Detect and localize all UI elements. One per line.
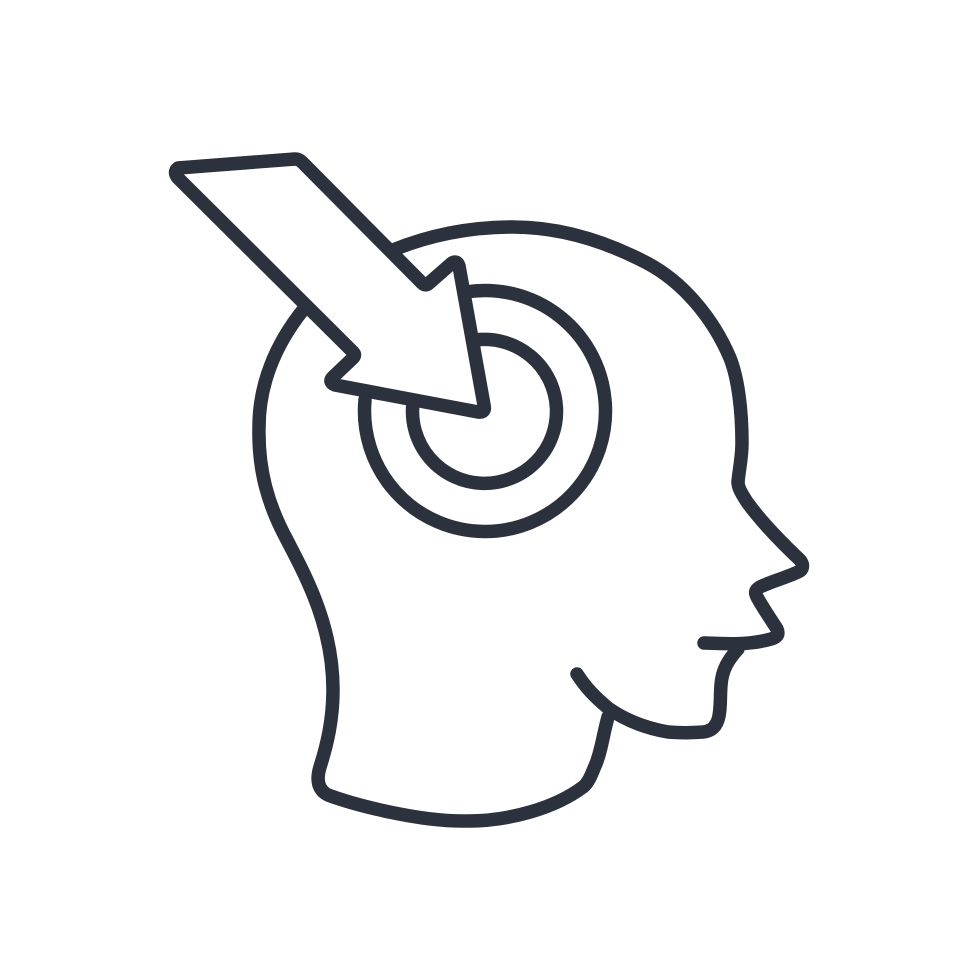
head outline: neck and back of head [259, 310, 608, 821]
head outline: upper skull and nose [393, 227, 802, 644]
head outline: chin and jaw [577, 649, 738, 733]
inner ring [413, 339, 557, 483]
target rings [364, 290, 605, 531]
outer ring [364, 290, 605, 531]
arrow [176, 159, 484, 412]
